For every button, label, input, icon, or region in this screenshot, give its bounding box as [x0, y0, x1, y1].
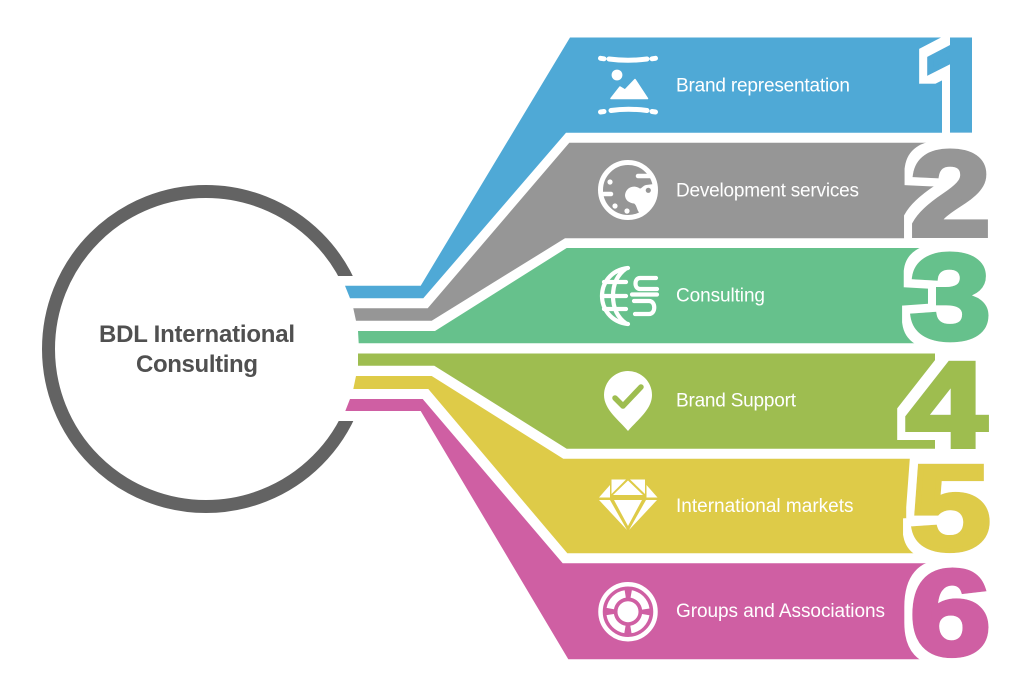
icon: target wheel: [600, 584, 656, 639]
central ring: [48, 192, 364, 506]
label: Development services: [676, 180, 859, 202]
numeral 2: 2: [910, 127, 991, 262]
title: BDL International Consulting: Consulting: [136, 351, 258, 378]
numeral 4: 4: [906, 338, 987, 473]
title: BDL International Consulting: [99, 321, 295, 378]
icon: planet: [600, 162, 656, 218]
label: Brand Support: [676, 390, 797, 412]
panel: 1 Brand representation: [345, 38, 972, 298]
panel: 4 Brand Support: [358, 338, 987, 473]
label: Consulting: [676, 286, 765, 306]
band 2: [353, 143, 935, 321]
label: Brand representation: [676, 76, 850, 96]
title: BDL International Consulting: BDL International: [99, 321, 295, 348]
numeral 6: 6: [910, 546, 991, 681]
band 3: [358, 248, 935, 343]
panel: 3 Consulting: [358, 230, 991, 365]
band 5: [353, 376, 935, 553]
numeral 5: 5: [910, 441, 991, 576]
numeral 1: 1: [920, 19, 1003, 154]
label: International markets: [676, 496, 854, 517]
numeral 3: 3: [910, 230, 991, 365]
icon: globe and currency: [602, 268, 657, 324]
icon: diamond: [599, 480, 658, 530]
panel: 5 International markets: [353, 376, 991, 576]
band 1: [345, 38, 945, 298]
label: Groups and Associations: [676, 601, 885, 622]
panel: 6 Groups and Associations: [345, 399, 991, 681]
icon: image frame: [600, 58, 656, 112]
icon: location check: [604, 371, 652, 431]
panel: 2 Development services: [353, 127, 991, 321]
numeral 1: [919, 38, 972, 133]
band 4: [358, 354, 935, 449]
band 6: [345, 399, 935, 659]
